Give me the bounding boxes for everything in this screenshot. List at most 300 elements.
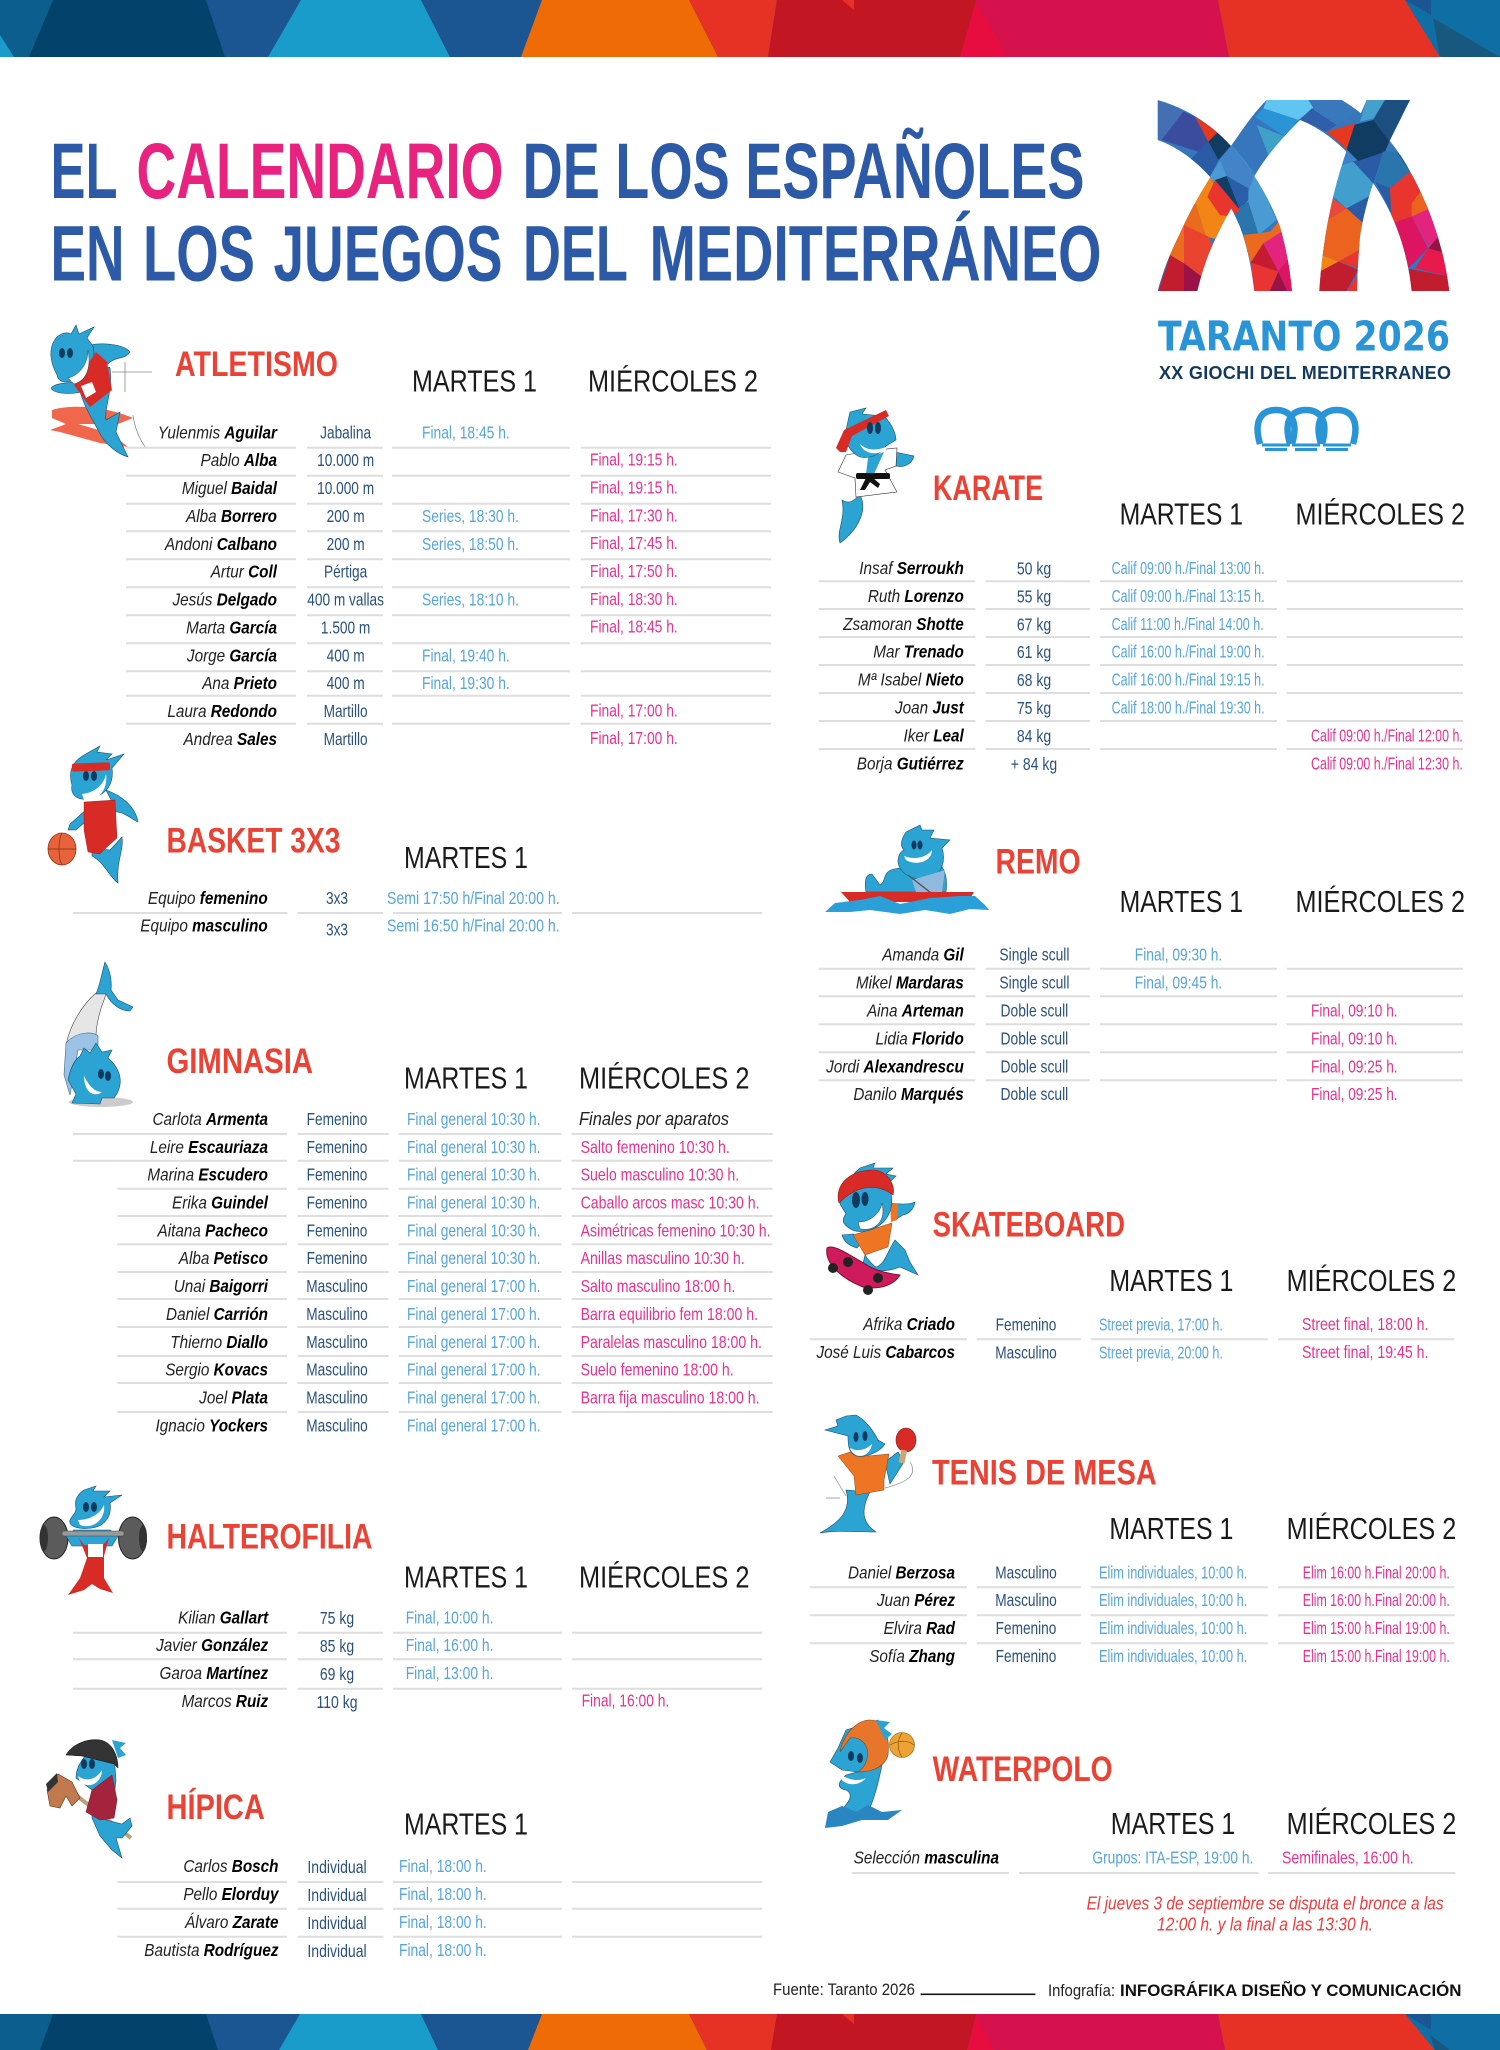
title: JUEGOS: [274, 208, 502, 298]
athlete names: Ruth Lorenzo: [868, 586, 964, 606]
miércoles times: Elim 15:00 h.Final 19:00 h.: [1303, 1647, 1450, 1667]
athlete names: Carlota Armenta: [152, 1109, 268, 1129]
events: 400 m: [327, 647, 365, 666]
athlete names: Danilo Marqués: [853, 1084, 964, 1105]
martes times: Final general 10:30 h.: [407, 1221, 540, 1241]
extended name rules: [73, 1134, 117, 1161]
athlete names: Miguel Baidal: [182, 478, 277, 498]
miércoles times: Final, 19:15 h.: [590, 450, 678, 470]
team names: Equipo femenino: [148, 888, 268, 908]
athlete names: Garoa Martínez: [159, 1663, 269, 1683]
miércoles times: Caballo arcos masc 10:30 h.: [581, 1193, 760, 1213]
athlete names: Pablo Alba: [201, 450, 277, 471]
weight classes: 84 kg: [1017, 726, 1051, 746]
martes times: [1099, 1563, 1247, 1667]
martes times: Final, 19:30 h.: [422, 673, 510, 694]
miércoles times: Salto masculino 18:00 h.: [581, 1277, 735, 1297]
footer: source and credit: Infografía:: [1048, 1981, 1115, 2000]
categories: Femenino: [996, 1647, 1056, 1667]
categories: Femenino: [307, 1110, 367, 1130]
heading: SKATEBOARD: [933, 1206, 1125, 1245]
icon: weightlifter dolphin mascot: [40, 1486, 147, 1595]
events: 400 m: [327, 674, 365, 694]
row rules: [852, 1872, 1455, 1874]
athlete names: Laura Redondo: [167, 701, 277, 721]
title: MEDITERRÁNEO: [650, 208, 1102, 298]
miércoles times: Final, 17:30 h.: [590, 506, 678, 526]
icon: basketball dolphin mascot: [48, 746, 138, 883]
column header: miércoles: MIÉRCOLES 2: [579, 1061, 750, 1096]
martes times: [399, 1857, 487, 1960]
logo subtitle: XX GIOCHI DEL MEDITERRANEO: [1159, 363, 1451, 383]
events: Jabalina: [320, 424, 371, 443]
heading: TENIS DE MESA: [932, 1454, 1157, 1493]
weight classes: 67 kg: [1017, 615, 1051, 635]
weight classes: + 84 kg: [1011, 754, 1057, 774]
athlete names: Juan Pérez: [876, 1590, 956, 1611]
martes times: Final, 18:00 h.: [399, 1884, 487, 1905]
athlete names: Andrea Sales: [183, 729, 277, 749]
athlete names: Marina Escudero: [147, 1165, 268, 1185]
athlete names: [842, 558, 965, 774]
heading: BASKET 3X3: [166, 822, 340, 861]
categories: Masculino: [995, 1592, 1057, 1611]
athlete names: Jesús Delgado: [172, 589, 277, 610]
icon: athlete dolphin mascot: [50, 325, 152, 457]
miércoles times: Elim 15:00 h.Final 19:00 h.: [1303, 1619, 1450, 1639]
column header: martes: MARTES 1: [404, 1559, 528, 1594]
categories: Femenino: [307, 1166, 367, 1185]
boat classes: Doble scull: [1001, 1029, 1068, 1049]
column header: martes: MARTES 1: [1120, 884, 1243, 919]
bronze and final note: 12:00 h. y la final a las 13:30 h.: [1157, 1915, 1373, 1935]
logo: XX arches: [1153, 97, 1453, 297]
weight classes: 85 kg: [320, 1636, 354, 1656]
footer: source and credit: INFOGRÁFIKA DISEÑO Y COMUNICACIÓN: [1120, 1980, 1462, 2000]
boat classes: Doble scull: [1001, 1057, 1068, 1077]
athlete names: Zsamoran Shotte: [842, 614, 964, 634]
events: 3x3: [326, 889, 348, 909]
martes times: Series, 18:10 h.: [422, 590, 519, 610]
athlete names: Andoni Calbano: [164, 534, 277, 554]
column header: miércoles: MIÉRCOLES 2: [579, 1559, 750, 1594]
events: Pértiga: [324, 563, 367, 582]
events: Martillo: [324, 730, 368, 749]
martes times: Elim individuales, 10:00 h.: [1099, 1591, 1247, 1611]
column header: martes: MARTES 1: [1109, 1263, 1233, 1298]
martes times: Calif 16:00 h./Final 19:15 h.: [1112, 671, 1265, 690]
athlete names: Sofía Zhang: [869, 1646, 955, 1666]
athlete names: [155, 1607, 270, 1711]
column header: martes: MARTES 1: [404, 1061, 528, 1096]
martes times: Street previa, 17:00 h.: [1099, 1315, 1223, 1335]
athlete names: Iker Leal: [903, 725, 964, 746]
column header: martes: MARTES 1: [404, 840, 528, 875]
martes times: Final general 10:30 h.: [407, 1193, 540, 1213]
miércoles times: [590, 450, 678, 749]
categories: [995, 1564, 1057, 1667]
martes times: Calif 18:00 h./Final 19:30 h.: [1112, 698, 1265, 718]
miércoles times: [1302, 1314, 1428, 1362]
martes times: Elim individuales, 10:00 h.: [1099, 1563, 1247, 1583]
icon: water polo dolphin mascot: [825, 1720, 914, 1828]
heading: KARATE: [933, 469, 1043, 508]
martes times: Final, 18:00 h.: [399, 1912, 487, 1932]
miércoles times: Final, 17:00 h.: [590, 729, 678, 749]
martes times: Calif 16:00 h./Final 19:00 h.: [1112, 643, 1265, 662]
categories: [995, 1316, 1057, 1363]
miércoles times: Calif 09:00 h./Final 12:00 h.: [1311, 726, 1463, 746]
column header: martes: MARTES 1: [1120, 497, 1243, 532]
martes times: Elim individuales, 10:00 h.: [1099, 1647, 1247, 1667]
boat classes: Single scull: [999, 945, 1069, 965]
bronze and final note: El jueves 3 de septiembre se disputa el bronce a las: [1087, 1893, 1444, 1913]
athlete names: Marta García: [186, 617, 277, 638]
categories: Individual: [307, 1885, 367, 1905]
athlete names: Unai Baigorri: [174, 1276, 268, 1296]
athlete names: Afrika Criado: [862, 1314, 955, 1334]
panel: remo: [819, 825, 1465, 1105]
athlete names: [147, 1109, 268, 1436]
athlete names: Mikel Mardaras: [856, 972, 964, 993]
miércoles times: Suelo femenino 18:00 h.: [581, 1360, 734, 1380]
miércoles times: [1311, 726, 1463, 774]
title: EN: [50, 208, 124, 298]
martes times: Final general 17:00 h.: [407, 1304, 540, 1324]
martes times: Final, 13:00 h.: [406, 1663, 493, 1683]
column header: martes: MARTES 1: [1111, 1806, 1235, 1841]
martes times: Final general 17:00 h.: [407, 1388, 540, 1408]
row rules: [819, 969, 1463, 1080]
martes times: Final general 17:00 h.: [407, 1360, 540, 1380]
panel: karate: [819, 408, 1465, 774]
athlete names: Mª Isabel Nieto: [858, 669, 964, 690]
title: CALENDARIO: [136, 126, 504, 215]
footer: source and credit: Fuente: Taranto 2026: [773, 1980, 915, 1999]
athlete names: Jorge García: [186, 645, 277, 666]
rider names: [144, 1856, 279, 1960]
categories: [306, 1110, 368, 1436]
martes times: Street previa, 20:00 h.: [1099, 1343, 1223, 1363]
logo wordmark: TARANTO 2026: [1158, 313, 1450, 361]
athlete names: Elvira Rad: [884, 1618, 956, 1638]
martes times: Semi 16:50 h/Final 20:00 h.: [387, 916, 560, 936]
panel: skateboard: [810, 1163, 1456, 1363]
athlete names: Thierno Diallo: [170, 1332, 268, 1352]
athlete names: Sergio Kovacs: [165, 1359, 268, 1380]
weight classes: [1011, 559, 1057, 774]
athlete names: Alba Petisco: [178, 1248, 268, 1269]
martes times: Series, 18:50 h.: [422, 534, 519, 554]
martes times: [1135, 945, 1222, 993]
miércoles times: Anillas masculino 10:30 h.: [581, 1249, 745, 1269]
weight classes: 61 kg: [1017, 643, 1051, 663]
martes times: Final general 10:30 h.: [407, 1137, 540, 1157]
categories: Femenino: [307, 1222, 367, 1241]
miércoles times: Asimétricas femenino 10:30 h.: [581, 1221, 771, 1241]
column header: miércoles: MIÉRCOLES 2: [1296, 884, 1465, 919]
athlete names: Mar Trenado: [873, 642, 964, 662]
miércoles times: Final, 09:25 h.: [1311, 1058, 1398, 1077]
boat classes: [999, 945, 1069, 1105]
miércoles times: [1311, 1002, 1398, 1105]
categories: Individual: [307, 1941, 367, 1961]
athlete names: Ignacio Yockers: [156, 1415, 268, 1436]
athlete names: Artur Coll: [210, 562, 277, 582]
athlete names: Amanda Gil: [881, 945, 964, 965]
miércoles times: [581, 1137, 771, 1408]
categories: Individual: [307, 1857, 367, 1877]
weight classes: 75 kg: [1017, 698, 1051, 718]
column header: miércoles: MIÉRCOLES 2: [1296, 497, 1465, 532]
weight classes: 55 kg: [1017, 587, 1051, 607]
rider names: Bautista Rodríguez: [144, 1940, 279, 1960]
martes times: Final general 17:00 h.: [407, 1416, 540, 1436]
categories: Femenino: [996, 1619, 1056, 1639]
column header: miércoles: MIÉRCOLES 2: [1287, 1263, 1456, 1298]
categories: Masculino: [306, 1361, 368, 1380]
athlete names: Lidia Florido: [875, 1028, 964, 1049]
heading: ATLETISMO: [175, 345, 338, 384]
miércoles time: Semifinales, 16:00 h.: [1282, 1848, 1414, 1868]
heading: HALTEROFILIA: [166, 1517, 372, 1556]
miércoles times: Final, 09:10 h.: [1311, 1030, 1398, 1049]
martes times: [1112, 559, 1265, 718]
athlete names: Daniel Berzosa: [848, 1562, 955, 1583]
martes times: [387, 888, 560, 936]
column header: miércoles: MIÉRCOLES 2: [588, 364, 758, 399]
miércoles times: [1303, 1563, 1450, 1667]
footer: source and credit: [773, 1980, 1462, 2000]
panel: gimnasia: [64, 962, 773, 1436]
icon: gymnast dolphin mascot: [64, 962, 133, 1107]
categories: Masculino: [306, 1277, 368, 1297]
athlete names: Ana Prieto: [201, 673, 277, 693]
athlete names: Jordi Alexandrescu: [825, 1056, 964, 1077]
athlete names: Alba Borrero: [185, 506, 277, 526]
miércoles times: Final, 17:45 h.: [590, 533, 678, 554]
martes times: [422, 423, 519, 694]
miércoles times: Calif 09:00 h./Final 12:30 h.: [1311, 754, 1463, 774]
heading: REMO: [996, 843, 1080, 882]
events: 10.000 m: [317, 452, 374, 471]
athlete names: [825, 945, 964, 1105]
martes times: Final general 10:30 h.: [407, 1165, 540, 1185]
bottom colour band: [0, 2014, 1500, 2050]
martes times: Final, 18:00 h.: [399, 1857, 487, 1877]
icon: rowing dolphin mascot: [825, 825, 989, 914]
martes times: Final general 10:30 h.: [407, 1248, 540, 1269]
miércoles times: Final, 17:00 h.: [590, 701, 678, 721]
martes times: Series, 18:30 h.: [422, 506, 519, 526]
miércoles times: Final, 17:50 h.: [590, 561, 678, 581]
rider names: Pello Elorduy: [183, 1884, 279, 1904]
column header: miércoles: MIÉRCOLES 2: [1287, 1511, 1456, 1546]
athlete names: Daniel Carrión: [166, 1304, 268, 1324]
athlete names: Insaf Serroukh: [859, 558, 964, 578]
column header: martes: MARTES 1: [404, 1806, 528, 1841]
categories: Masculino: [306, 1333, 368, 1352]
heading: HÍPICA: [166, 1787, 265, 1827]
heading: GIMNASIA: [166, 1042, 313, 1081]
martes time: Grupos: ITA-ESP, 19:00 h.: [1092, 1848, 1253, 1868]
panel: halterofilia: [40, 1486, 762, 1712]
categories: Masculino: [995, 1344, 1057, 1363]
martes times: Final, 09:45 h.: [1135, 973, 1222, 993]
athlete names: Aina Arteman: [866, 1000, 964, 1021]
apparatus finals note: Finales por aparatos: [579, 1109, 729, 1129]
athlete names: Joel Plata: [198, 1387, 268, 1408]
top colour band: [0, 0, 1500, 57]
row rules: [73, 1633, 762, 1689]
categories: Masculino: [306, 1389, 368, 1408]
athlete names: [158, 422, 278, 749]
martes times: Final general 17:00 h.: [407, 1276, 540, 1297]
logo: three rings: [1258, 410, 1355, 450]
martes times: Calif 09:00 h./Final 13:00 h.: [1112, 559, 1265, 579]
athlete names: Javier González: [155, 1635, 269, 1655]
weight classes: 75 kg: [320, 1608, 354, 1628]
miércoles times: Elim 16:00 h.Final 20:00 h.: [1303, 1563, 1450, 1583]
athlete names: [848, 1562, 956, 1666]
events: 10.000 m: [317, 479, 374, 499]
miércoles times: Final, 18:45 h.: [590, 617, 678, 637]
row rules: [117, 1882, 762, 1937]
martes times: [406, 1608, 493, 1683]
martes times: Final, 18:00 h.: [399, 1940, 487, 1960]
panel: waterpolo: [825, 1720, 1456, 1935]
martes times: Final, 16:00 h.: [406, 1635, 493, 1655]
martes times: Final, 10:00 h.: [406, 1608, 493, 1628]
events: 1.500 m: [321, 619, 370, 638]
miércoles times: Street final, 18:00 h.: [1302, 1314, 1428, 1334]
categories: Masculino: [306, 1417, 368, 1436]
team name: Selección masculina: [854, 1847, 999, 1868]
miércoles times: Final, 19:15 h.: [590, 478, 678, 498]
icon: karate dolphin mascot: [836, 408, 914, 543]
title: DE LOS ESPAÑOLES: [522, 126, 1084, 215]
martes times: Semi 17:50 h/Final 20:00 h.: [387, 888, 560, 908]
panel: tenis de mesa: [810, 1415, 1456, 1667]
categories: Femenino: [307, 1250, 367, 1269]
categories: Individual: [307, 1913, 367, 1933]
martes times: Final general 17:00 h.: [407, 1332, 540, 1352]
row rules: [819, 581, 1463, 749]
row rules: [810, 1587, 1454, 1643]
boat classes: Doble scull: [1001, 1085, 1068, 1105]
row rules: [117, 1134, 773, 1412]
column header: martes: MARTES 1: [1109, 1511, 1233, 1546]
logo: Taranto 2026: [1153, 97, 1453, 449]
team names: [140, 888, 268, 936]
miércoles times: Barra fija masculino 18:00 h.: [581, 1388, 760, 1408]
miércoles times: Final, 09:10 h.: [1311, 1002, 1398, 1021]
events: 200 m: [327, 535, 365, 554]
title: EL: [50, 126, 118, 215]
icon: table tennis dolphin mascot: [820, 1415, 916, 1533]
miércoles times: Suelo masculino 10:30 h.: [581, 1165, 739, 1185]
athlete names: Erika Guindel: [172, 1192, 268, 1213]
events: 400 m vallas: [307, 591, 384, 610]
icon: equestrian dolphin mascot: [46, 1740, 132, 1858]
events: [307, 424, 384, 749]
miércoles times: Salto femenino 10:30 h.: [581, 1137, 730, 1157]
panel: basket 3x3: [48, 746, 762, 940]
categories: Femenino: [996, 1316, 1056, 1335]
martes times: Final, 19:40 h.: [422, 646, 510, 666]
athlete names: Joan Just: [894, 697, 965, 718]
athlete names: José Luis Cabarcos: [816, 1342, 955, 1362]
row rules: [810, 1338, 1454, 1340]
title: DEL: [523, 208, 628, 298]
heading: WATERPOLO: [933, 1750, 1113, 1789]
events: 3x3: [326, 921, 348, 940]
miércoles times: Street final, 19:45 h.: [1302, 1342, 1428, 1362]
events: Martillo: [324, 702, 368, 722]
martes times: Final, 09:30 h.: [1135, 945, 1222, 965]
categories: Femenino: [307, 1194, 367, 1213]
title: LOS: [143, 208, 255, 298]
column header: miércoles: MIÉRCOLES 2: [1287, 1806, 1456, 1841]
categories: [307, 1857, 367, 1961]
martes times: Final general 10:30 h.: [407, 1109, 540, 1129]
martes times: [407, 1109, 540, 1436]
athlete names: Marcos Ruiz: [182, 1691, 269, 1711]
miércoles times: Paralelas masculino 18:00 h.: [581, 1332, 762, 1352]
rider names: Álvaro Zarate: [184, 1912, 278, 1932]
rider names: Carlos Bosch: [183, 1856, 278, 1877]
events: 200 m: [327, 507, 365, 527]
athlete names: Borja Gutiérrez: [857, 753, 964, 774]
categories: Masculino: [995, 1564, 1057, 1583]
column header: martes: MARTES 1: [412, 364, 537, 399]
row rules: [126, 448, 771, 724]
boat classes: Single scull: [999, 973, 1069, 993]
martes times: Calif 11:00 h./Final 14:00 h.: [1112, 615, 1264, 634]
miércoles times: Elim 16:00 h.Final 20:00 h.: [1303, 1591, 1450, 1611]
panel: atletismo: [50, 325, 771, 749]
athlete names: Yulenmis Aguilar: [158, 422, 278, 443]
title: [50, 126, 1102, 298]
athlete names: Leire Escauriaza: [150, 1137, 268, 1157]
team names: Equipo masculino: [140, 916, 268, 936]
bronze and final note: [1087, 1893, 1444, 1935]
events: [326, 889, 348, 940]
athlete names: Kilian Gallart: [178, 1607, 270, 1628]
weight classes: 69 kg: [320, 1664, 354, 1684]
martes times: Elim individuales, 10:00 h.: [1099, 1619, 1247, 1639]
athlete names: [816, 1314, 955, 1362]
icon: skateboarding dolphin mascot: [827, 1163, 918, 1295]
weight classes: [316, 1608, 358, 1712]
panel: hípica: [46, 1740, 762, 1961]
weight classes: 68 kg: [1017, 670, 1051, 691]
miércoles times: Final, 18:30 h.: [590, 589, 678, 609]
martes times: Final, 18:45 h.: [422, 423, 510, 443]
martes times: [1099, 1315, 1223, 1363]
miércoles times: Final, 16:00 h.: [582, 1691, 669, 1711]
athlete names: Aitana Pacheco: [157, 1220, 268, 1241]
boat classes: Doble scull: [1001, 1001, 1068, 1021]
weight classes: 50 kg: [1017, 559, 1051, 579]
categories: Femenino: [307, 1138, 367, 1157]
miércoles times: Barra equilibrio fem 18:00 h.: [581, 1304, 758, 1324]
row rules: [73, 912, 762, 914]
miércoles times: Final, 09:25 h.: [1311, 1086, 1398, 1105]
categories: Masculino: [306, 1305, 368, 1324]
martes times: Calif 09:00 h./Final 13:15 h.: [1112, 587, 1265, 607]
weight classes: 110 kg: [316, 1692, 358, 1712]
